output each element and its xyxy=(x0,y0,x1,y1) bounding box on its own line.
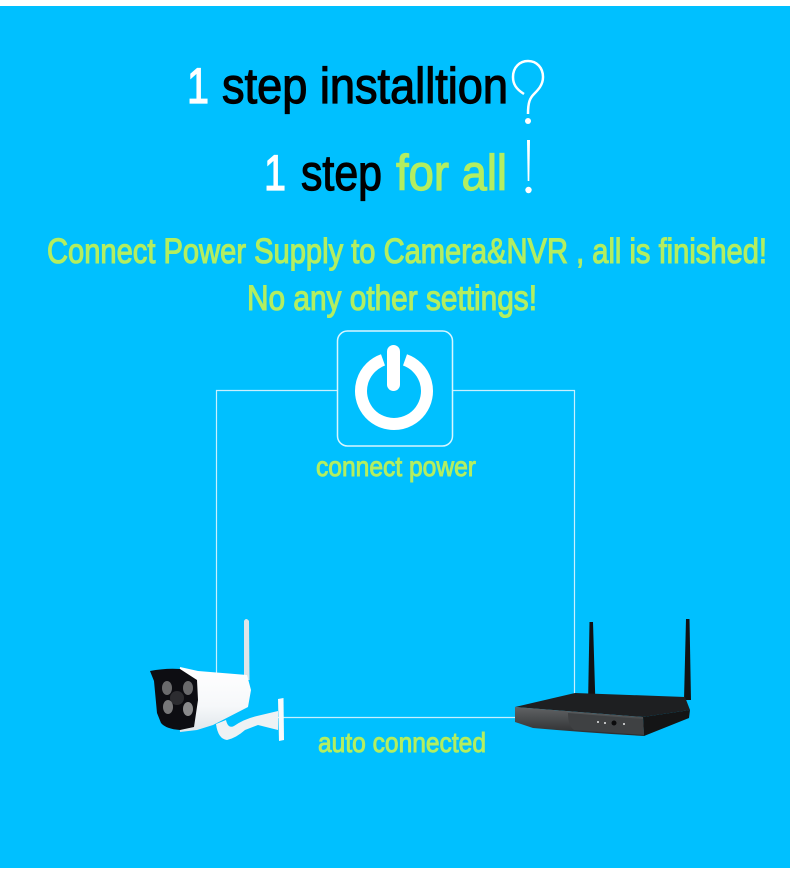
subtitle: 1 step for all: step xyxy=(301,145,382,201)
subtitle: 1 step for all xyxy=(264,145,507,201)
subtitle: 1 step for all: for all xyxy=(396,145,507,201)
icon: power button xyxy=(338,331,452,446)
subtitle: 1 step for all: 1 xyxy=(264,145,286,201)
title: 1 step installtion: step installtion xyxy=(222,58,508,114)
label: connect power: connect power xyxy=(316,451,476,482)
icon: NVR recorder xyxy=(515,619,691,736)
icon: exclamation mark xyxy=(525,140,532,193)
icon: bullet camera xyxy=(150,619,284,741)
connection lines xyxy=(216,390,574,718)
instruction line 2: No any other settings! xyxy=(247,279,537,318)
label: auto connected: auto connected xyxy=(318,727,486,758)
title: 1 step installtion: 1 xyxy=(187,58,209,114)
icon: question mark xyxy=(513,61,543,124)
